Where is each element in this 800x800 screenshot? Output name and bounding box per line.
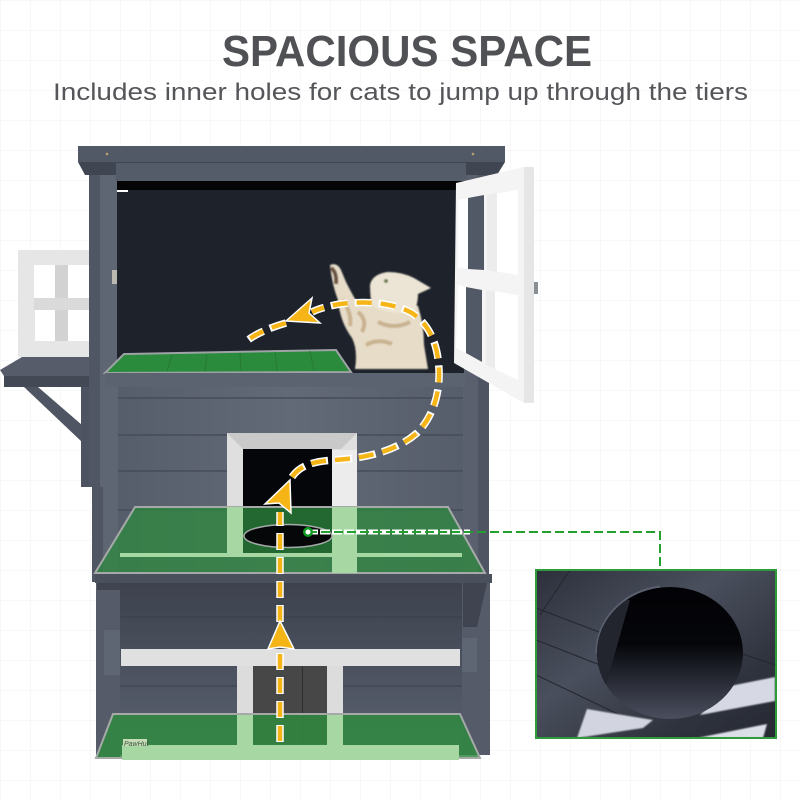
white doorway frame bbox=[227, 433, 357, 573]
lower wall bbox=[96, 583, 490, 758]
left side window and balcony bbox=[0, 250, 92, 487]
upper sill bbox=[105, 373, 465, 387]
top tier green floor bbox=[105, 350, 351, 373]
jump hole bbox=[244, 524, 332, 548]
upper wall bbox=[118, 387, 463, 577]
bottom tier green floor bbox=[96, 714, 480, 760]
roof bbox=[78, 146, 505, 181]
title: SPACIOUS SPACE bbox=[222, 27, 592, 76]
yellow jump path: lower straight bbox=[268, 512, 294, 742]
green leader line to detail bbox=[303, 527, 660, 570]
upper left posts bbox=[89, 162, 118, 582]
lower door bbox=[237, 666, 343, 744]
arrow head: top tier bbox=[286, 298, 320, 323]
upper interior bbox=[112, 181, 464, 376]
subtitle: Includes inner holes for cats to jump up through the tiers bbox=[53, 79, 748, 106]
arrow head: lower bbox=[268, 621, 294, 649]
yellow jump path: curve to top tier bbox=[248, 298, 439, 513]
cat house bbox=[78, 146, 538, 760]
left balcony bbox=[0, 357, 92, 487]
middle tier front edge bbox=[95, 574, 492, 583]
cat bbox=[330, 264, 431, 369]
arrow head: doorway bbox=[265, 480, 291, 513]
detail inset: hole close-up bbox=[536, 570, 776, 738]
middle tier green floor bbox=[95, 507, 485, 573]
right posts bbox=[463, 162, 489, 582]
brand label: PawHut bbox=[124, 741, 150, 748]
left window frame bbox=[18, 250, 90, 357]
open right door window bbox=[454, 167, 538, 403]
white lower beam bbox=[121, 649, 460, 666]
